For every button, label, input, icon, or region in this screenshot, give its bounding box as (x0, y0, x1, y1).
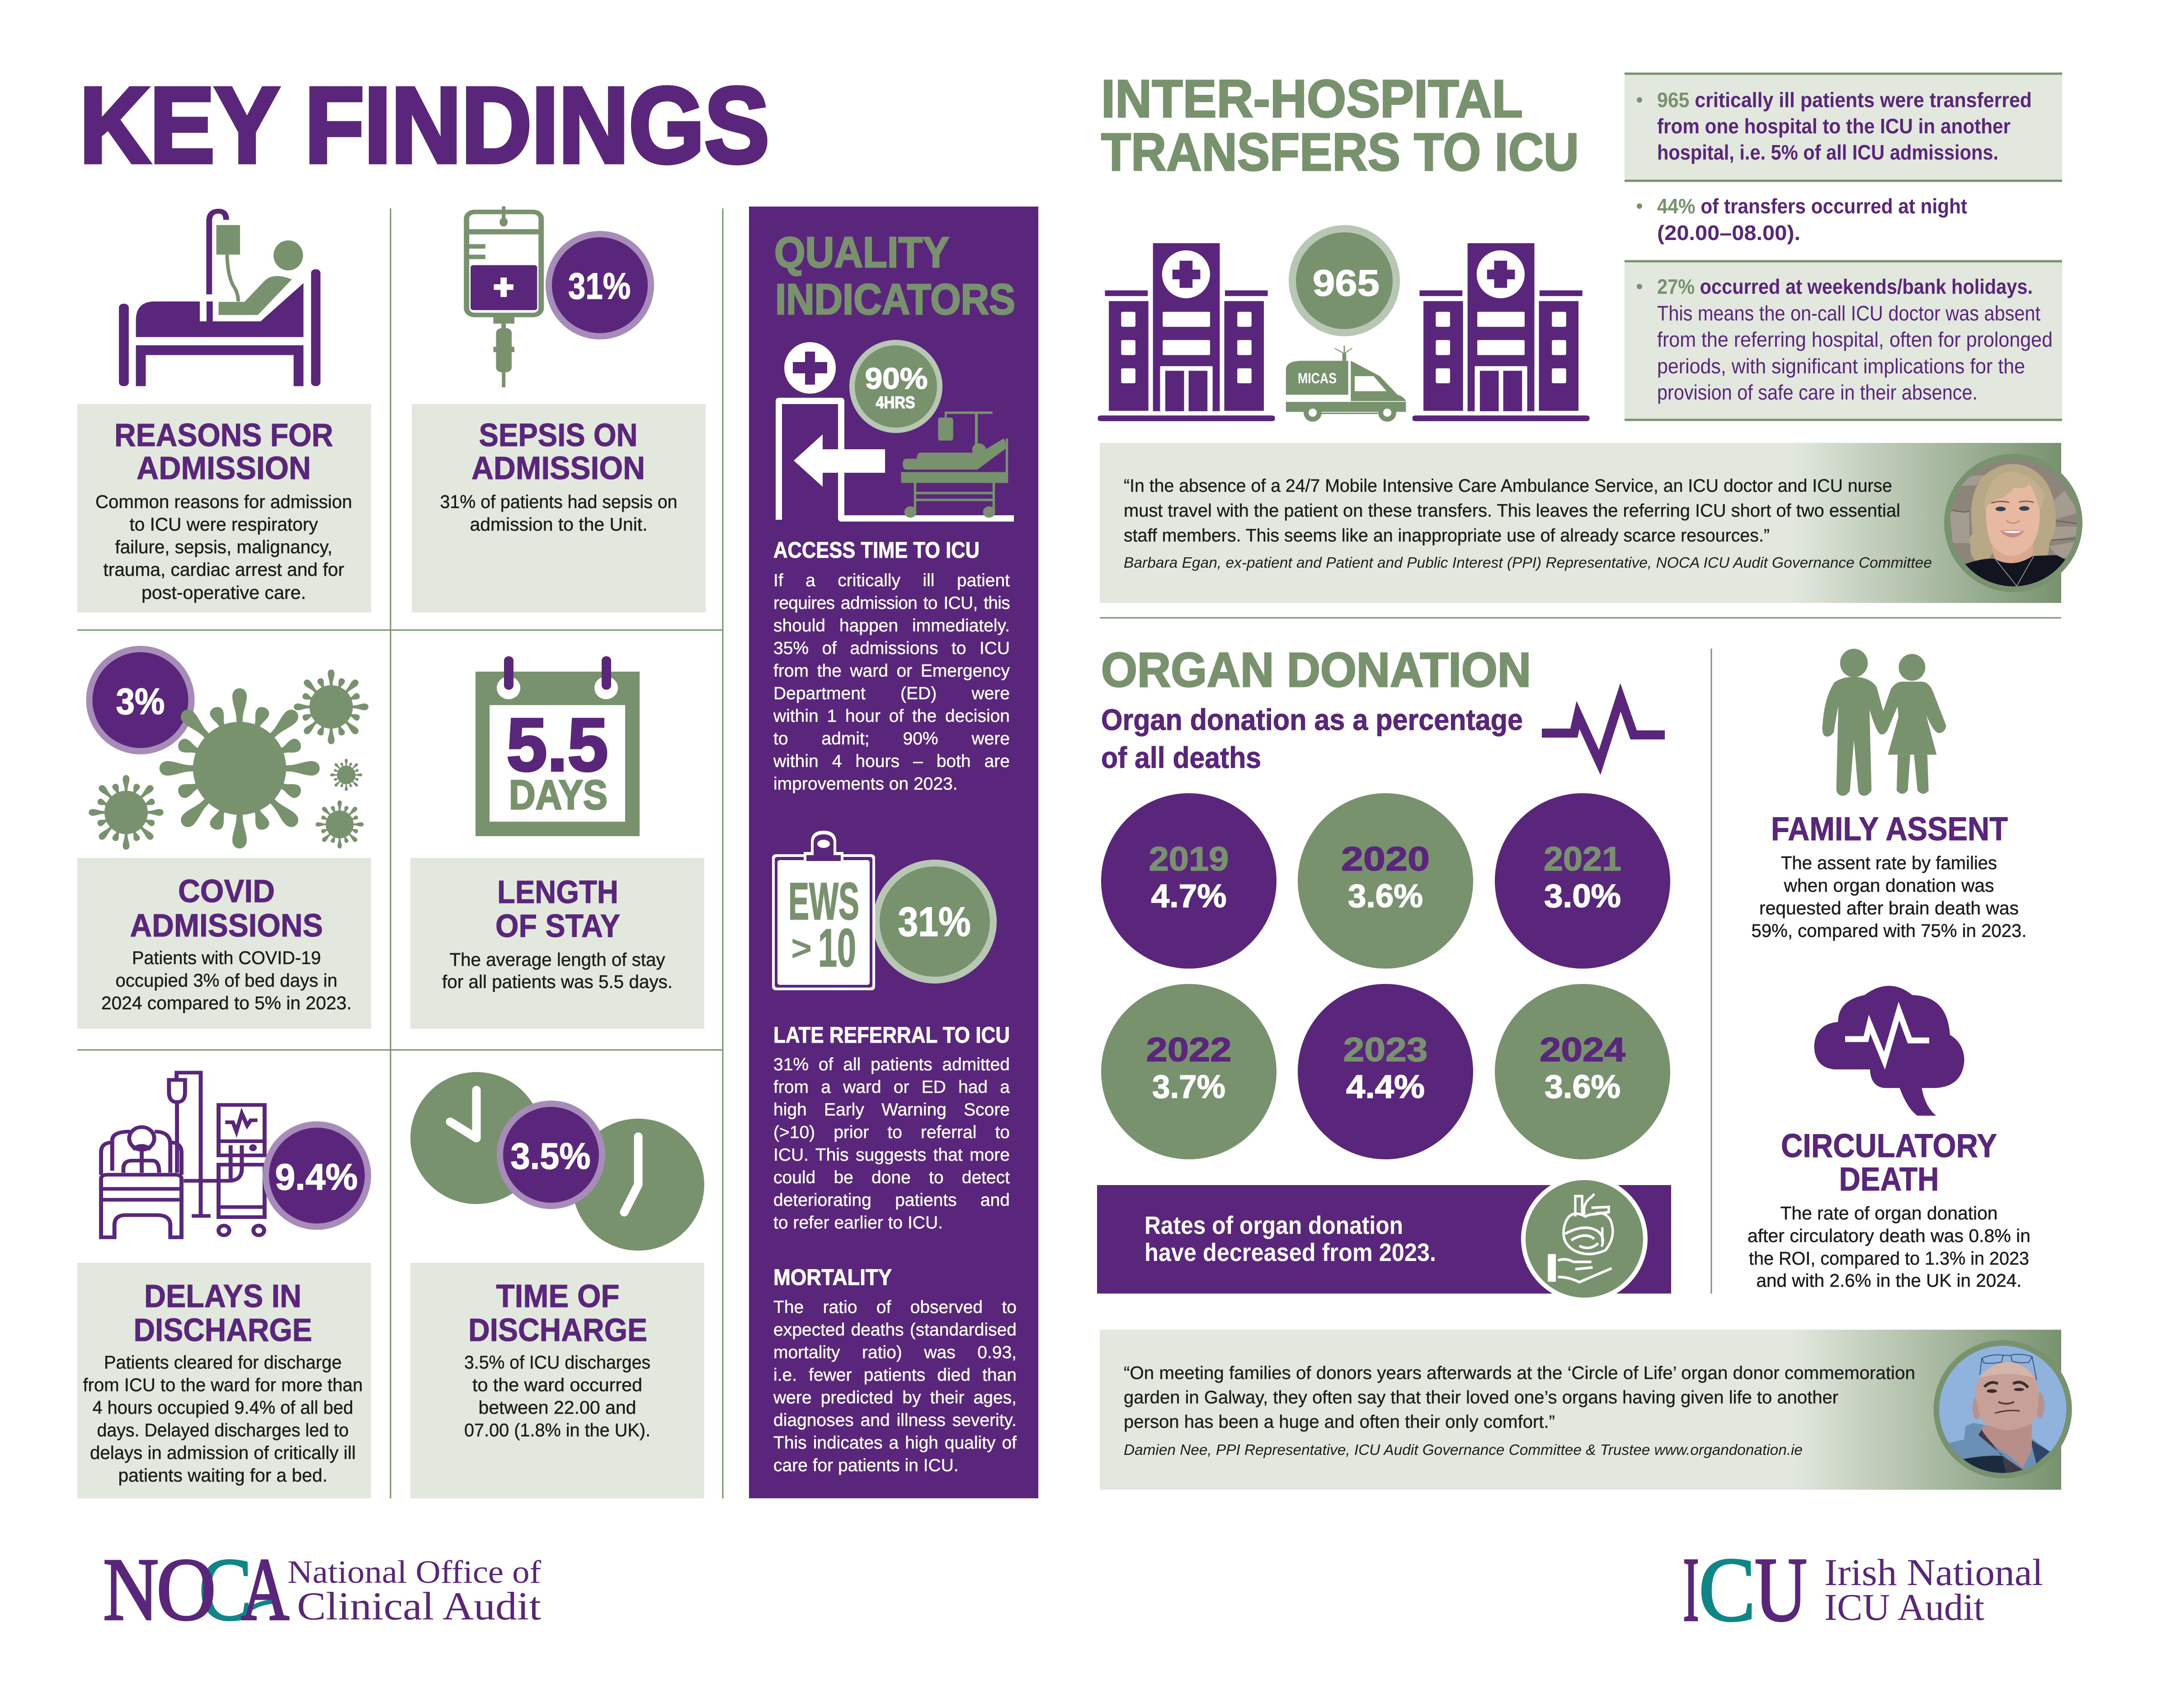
text: late referral to ICU: could be done to detect (773, 1168, 1010, 1187)
icon: patient on trolley (901, 411, 1008, 518)
portrait: Barbara Egan (1944, 454, 2082, 600)
callout: rates decreased: have decreased from 2023. (1145, 1238, 1436, 1266)
logo: Irish National ICU Audit: U (1755, 1539, 1807, 1640)
icon: clipboard EWS >10: 10 (818, 918, 856, 978)
body text: The average length of stay (449, 949, 665, 970)
badge 90% 4hrs (849, 340, 942, 433)
body text: after circulatory death was 0.8% in (1747, 1225, 2030, 1246)
attribution: Barbara Egan, ex-patient and Patient and Public Interest (PPI) Representative, NOCA ICU Audit Governance Committee (1124, 554, 1932, 571)
text: access time to ICU: requires admission to ICU, this (773, 593, 1010, 613)
text: late referral to ICU: deteriorating patients and (773, 1190, 1010, 1209)
2021: 2021 (1544, 840, 1621, 878)
logo: NOCA: Clinical Audit (297, 1585, 541, 1628)
panel: circulatory death (1747, 986, 2030, 1291)
statistic: 965 transferred: 965 critically ill patients were transferred (1657, 88, 2032, 112)
logo: Irish National ICU Audit (1683, 1539, 2043, 1640)
badge 90% 4hrs: 4HRS (876, 393, 915, 412)
heading: inter-hospital transfers: INTER-HOSPITAL (1101, 69, 1523, 129)
body text: 07.00 (1.8% in the UK). (464, 1420, 650, 1440)
icon: calendar: DAYS (509, 772, 608, 818)
text: mortality: i.e. fewer patients died than (773, 1365, 1017, 1385)
statistic: 27% weekends (1657, 275, 2053, 404)
badge 965: 965 (1313, 263, 1380, 304)
body text: to the ward occurred (472, 1374, 642, 1395)
icon: couple (1823, 649, 1946, 796)
2022 (1101, 984, 1276, 1159)
icon: ICU bed and monitor (101, 1073, 264, 1237)
statistic: 44% at night: (20.00–08.00). (1657, 221, 1800, 245)
text: access time to ICU: within 4 hours – both are (773, 751, 1010, 771)
icon: heart in hand (1523, 1178, 1645, 1300)
body text: trauma, cardiac arrest and for (103, 559, 344, 580)
statistic: 27% weekends: provision of safe care in their absence. (1657, 381, 1978, 404)
heading: mortality: MORTALITY (773, 1265, 892, 1290)
heading line 2: ADMISSION (137, 451, 311, 486)
heading: FAMILY ASSENT (1771, 811, 2008, 847)
text: access time to ICU: from the ward or Emergency (773, 661, 1010, 681)
logo: Irish National ICU Audit: C (1699, 1539, 1756, 1640)
badge 31%: 31% (568, 266, 631, 307)
badge 90% 4hrs: 90% (865, 362, 928, 395)
text: late referral to ICU: from a ward or ED had a (773, 1077, 1010, 1096)
body text: when organ donation was (1784, 875, 1994, 896)
subheading: Organ donation as a percentage (1101, 703, 1523, 736)
body text: 3.5% of ICU discharges (464, 1352, 650, 1373)
heading: CIRCULATORY (1781, 1128, 1997, 1164)
heading line 2: OF STAY (495, 908, 620, 944)
body text: to ICU were respiratory (129, 514, 318, 535)
quote text: “On meeting families of donors years afterwards at the ‘Circle of Life’ organ donor commemoration (1124, 1363, 1915, 1383)
body text: for all patients was 5.5 days. (442, 971, 673, 992)
statistic: 965 transferred (1657, 88, 2032, 164)
2023: 4.4% (1346, 1069, 1425, 1105)
icon: patient in hospital bed (119, 211, 320, 386)
body text: days. Delayed discharges led to (97, 1420, 349, 1440)
statistic: 965 transferred: from one hospital to the ICU in another (1657, 114, 2011, 138)
body text: delays in admission of critically ill (90, 1442, 356, 1463)
text: mortality: expected deaths (standardised (773, 1320, 1017, 1340)
2024: 2024 (1540, 1030, 1625, 1068)
heading: TIME OF (496, 1279, 619, 1314)
quote text: garden in Galway, they often say that their loved one’s organs having given life to another (1124, 1388, 1838, 1407)
heading line 2: INDICATORS (775, 275, 1015, 324)
panel: quality indicators (749, 207, 1038, 1498)
title: KEY FINDINGS (80, 66, 769, 185)
heading: DELAYS IN (144, 1279, 301, 1314)
logo: NOCA: A (241, 1540, 289, 1639)
subheading: of all deaths (1101, 741, 1261, 774)
text: mortality: The ratio of observed to (773, 1297, 1017, 1317)
callout: rates decreased (1097, 1178, 1671, 1300)
body text: requested after brain death was (1759, 898, 2019, 918)
2019 (1101, 793, 1276, 969)
body text: the ROI, compared to 1.3% in 2023 (1749, 1248, 2029, 1269)
2023 (1298, 984, 1473, 1159)
badge 31% EWS: 31% (898, 899, 971, 945)
text: mortality: diagnoses and illness severity. (773, 1410, 1017, 1430)
text: access time to ICU (773, 569, 1010, 795)
body text: The assent rate by families (1781, 852, 1997, 873)
heading line 2: DISCHARGE (134, 1313, 312, 1348)
text: late referral to ICU: to refer earlier to ICU. (773, 1213, 943, 1232)
panel: sepsis on admission (412, 206, 706, 612)
heading: SEPSIS ON (479, 418, 637, 453)
body text: from ICU to the ward for more than (83, 1374, 363, 1395)
text: access time to ICU: If a critically ill patient (773, 570, 1010, 590)
heading: inter-hospital transfers (1101, 69, 1579, 182)
badge 965 (1289, 225, 1400, 336)
icon: ECG line (1542, 697, 1665, 762)
body text: and with 2.6% in the UK in 2024. (1757, 1270, 2021, 1291)
heading line 2: DEATH (1839, 1161, 1939, 1198)
body text (442, 949, 673, 992)
body text: 31% of patients had sepsis on (440, 491, 677, 512)
text: late referral to ICU: high Early Warning Score (773, 1100, 1010, 1119)
icon: IV bag (466, 206, 541, 387)
2020: 2020 (1341, 840, 1430, 878)
heading: REASONS FOR (114, 418, 333, 453)
badge 9.4% (263, 1121, 371, 1230)
logo: Irish National ICU Audit: I (1683, 1539, 1699, 1640)
body text: post-operative care. (141, 582, 306, 603)
heading: organ donation: ORGAN DONATION (1101, 642, 1531, 697)
2021: 3.0% (1544, 878, 1621, 914)
logo: NOCA: National Office of (287, 1554, 541, 1590)
icon: two clocks (410, 1072, 704, 1251)
body text (1747, 1203, 2030, 1291)
text: access time to ICU: Department (ED) were (773, 683, 1010, 703)
body text (95, 491, 352, 603)
body text: 4 hours occupied 9.4% of all bed (92, 1397, 353, 1418)
icon: plus sign (784, 342, 836, 394)
badge 31% EWS (873, 860, 997, 983)
callout: rates decreased: Rates of organ donation (1145, 1211, 1403, 1239)
body text: failure, sepsis, malignancy, (115, 536, 333, 557)
quote text: must travel with the patient on these transfers. This leaves the referring ICU short of two essential (1124, 501, 1900, 521)
body text: between 22.00 and (478, 1397, 636, 1418)
icon: calendar: 5.5 (506, 703, 608, 787)
text: late referral to ICU: (>10) prior to referral to (773, 1123, 1010, 1142)
text: access time to ICU: should happen immediately. (773, 616, 1010, 635)
panel: transfer statistics (1625, 74, 2062, 420)
heading: access time: ACCESS TIME TO ICU (773, 537, 980, 563)
badge 3.5% (497, 1101, 605, 1209)
statistic: 44% at night (1657, 194, 1967, 245)
body text: 59%, compared with 75% in 2023. (1751, 920, 2027, 941)
icon: brain cloud with pulse (1814, 986, 1964, 1116)
body text (464, 1352, 650, 1440)
text: mortality: This indicates a high quality of (773, 1433, 1017, 1453)
portrait: Damien Nee (1934, 1340, 2072, 1478)
chart: donation rate circles (1101, 793, 1670, 1159)
statistic: 27% weekends: This means the on-call ICU doctor was absent (1657, 301, 2040, 325)
statistic: 965 transferred: hospital, i.e. 5% of all ICU admissions. (1657, 141, 1998, 164)
body text (101, 947, 352, 1013)
panel: patient quote Barbara Egan (1100, 443, 2082, 603)
2024 (1495, 984, 1670, 1159)
icon: clipboard EWS >10 (772, 831, 875, 990)
2022: 2022 (1146, 1030, 1231, 1068)
subheading (1101, 703, 1523, 774)
panel: reasons for admission (77, 211, 371, 612)
body text: occupied 3% of bed days in (116, 970, 337, 991)
2021 (1495, 793, 1670, 969)
body text: Common reasons for admission (95, 491, 352, 512)
quote text (1124, 1363, 1915, 1432)
icon: arrow (794, 434, 885, 487)
panel: length of stay (410, 656, 704, 1029)
body text: admission to the Unit. (470, 514, 647, 535)
text: late referral to ICU: 31% of all patients admitted (773, 1055, 1010, 1074)
text: access time to ICU: within 1 hour of the decision (773, 706, 1010, 726)
heading line 2: DISCHARGE (468, 1313, 647, 1348)
body text (83, 1352, 363, 1486)
2020 (1298, 793, 1473, 969)
text: access time to ICU: improvements on 2023. (773, 774, 958, 794)
heading: late referral: LATE REFERRAL TO ICU (773, 1022, 1010, 1048)
icon: hospitals (1098, 243, 1589, 421)
2022: 3.7% (1152, 1069, 1225, 1105)
text: access time to ICU: to admit; 90% were (773, 729, 1010, 748)
statistic: 27% weekends: from the referring hospital, often for prolonged (1657, 328, 2053, 351)
badge 3% (86, 646, 194, 754)
body text: Patients cleared for discharge (104, 1352, 342, 1373)
heading: LENGTH (497, 875, 618, 910)
2019: 4.7% (1151, 878, 1227, 914)
body text: 2024 compared to 5% in 2023. (101, 993, 352, 1013)
text: mortality: care for patients in ICU. (773, 1455, 959, 1475)
panel: delays in discharge (77, 1073, 371, 1498)
body text: The rate of organ donation (1780, 1203, 1998, 1223)
badge 31% (546, 231, 654, 339)
badge 3%: 3% (116, 681, 165, 722)
logo: NOCA (103, 1540, 541, 1639)
text: late referral to ICU: ICU. This suggests that more (773, 1145, 1010, 1164)
body text (1751, 852, 2027, 941)
2024: 3.6% (1545, 1069, 1620, 1105)
logo: Irish National ICU Audit: Irish National (1824, 1552, 2043, 1594)
statistic: 27% weekends: periods, with significant implications for the (1657, 354, 2025, 378)
quote text: person has been a huge and often their only comfort.” (1124, 1412, 1555, 1432)
panel: family assent (1751, 649, 2027, 941)
attribution: Damien Nee, PPI Representative, ICU Audit Governance Committee & Trustee www.organdonation.ie (1124, 1441, 1803, 1458)
text: mortality: were predicted by their ages, (773, 1388, 1017, 1407)
statistic: 44% at night: 44% of transfers occurred at night (1657, 194, 1967, 218)
panel: time of discharge (410, 1072, 704, 1498)
body text: Patients with COVID-19 (132, 947, 321, 968)
badge 3.5%: 3.5% (511, 1136, 590, 1177)
text: access time to ICU: 35% of admissions to ICU (773, 638, 1010, 658)
heading line 2: ADMISSIONS (130, 908, 323, 944)
text: mortality (773, 1296, 1017, 1477)
2023: 2023 (1343, 1030, 1427, 1068)
icon: viruses (89, 669, 368, 850)
body text: patients waiting for a bed. (118, 1465, 327, 1486)
text: mortality: mortality ratio) was 0.93, (773, 1342, 1017, 1362)
quote text (1124, 476, 1900, 546)
icon: clipboard EWS >10: EWS (788, 872, 859, 931)
statistic: 27% weekends: 27% occurred at weekends/bank holidays. (1657, 275, 2033, 298)
icon: MICAS ambulance: MICAS (1298, 370, 1337, 386)
logo: Irish National ICU Audit: ICU Audit (1824, 1586, 1984, 1628)
body text (440, 491, 677, 535)
heading: QUALITY (774, 228, 949, 277)
badge 9.4%: 9.4% (275, 1157, 358, 1198)
logo: NOCA: C (199, 1540, 252, 1639)
heading line 2: ADMISSION (471, 451, 645, 486)
quote text: staff members. This seems like an inappropriate use of already scarce resources.” (1124, 526, 1770, 546)
icon: calendar (476, 656, 640, 836)
heading: inter-hospital transfers: TRANSFERS TO ICU (1101, 122, 1579, 182)
logo: NOCA: O (156, 1540, 216, 1639)
quote text: “In the absence of a 24/7 Mobile Intensive Care Ambulance Service, an ICU doctor and ICU nurse (1124, 476, 1892, 496)
heading: COVID (178, 874, 275, 909)
panel: covid admissions (77, 646, 371, 1029)
text: late referral to ICU (773, 1053, 1010, 1234)
icon: door frame (779, 401, 1014, 520)
icon: MICAS ambulance (1286, 346, 1406, 422)
panel: quote Damien Nee (1100, 1330, 2072, 1490)
logo: NOCA: N (103, 1540, 159, 1639)
2019: 2019 (1149, 840, 1229, 878)
2020: 3.6% (1348, 878, 1423, 914)
icon: clipboard EWS >10: > (791, 928, 812, 968)
